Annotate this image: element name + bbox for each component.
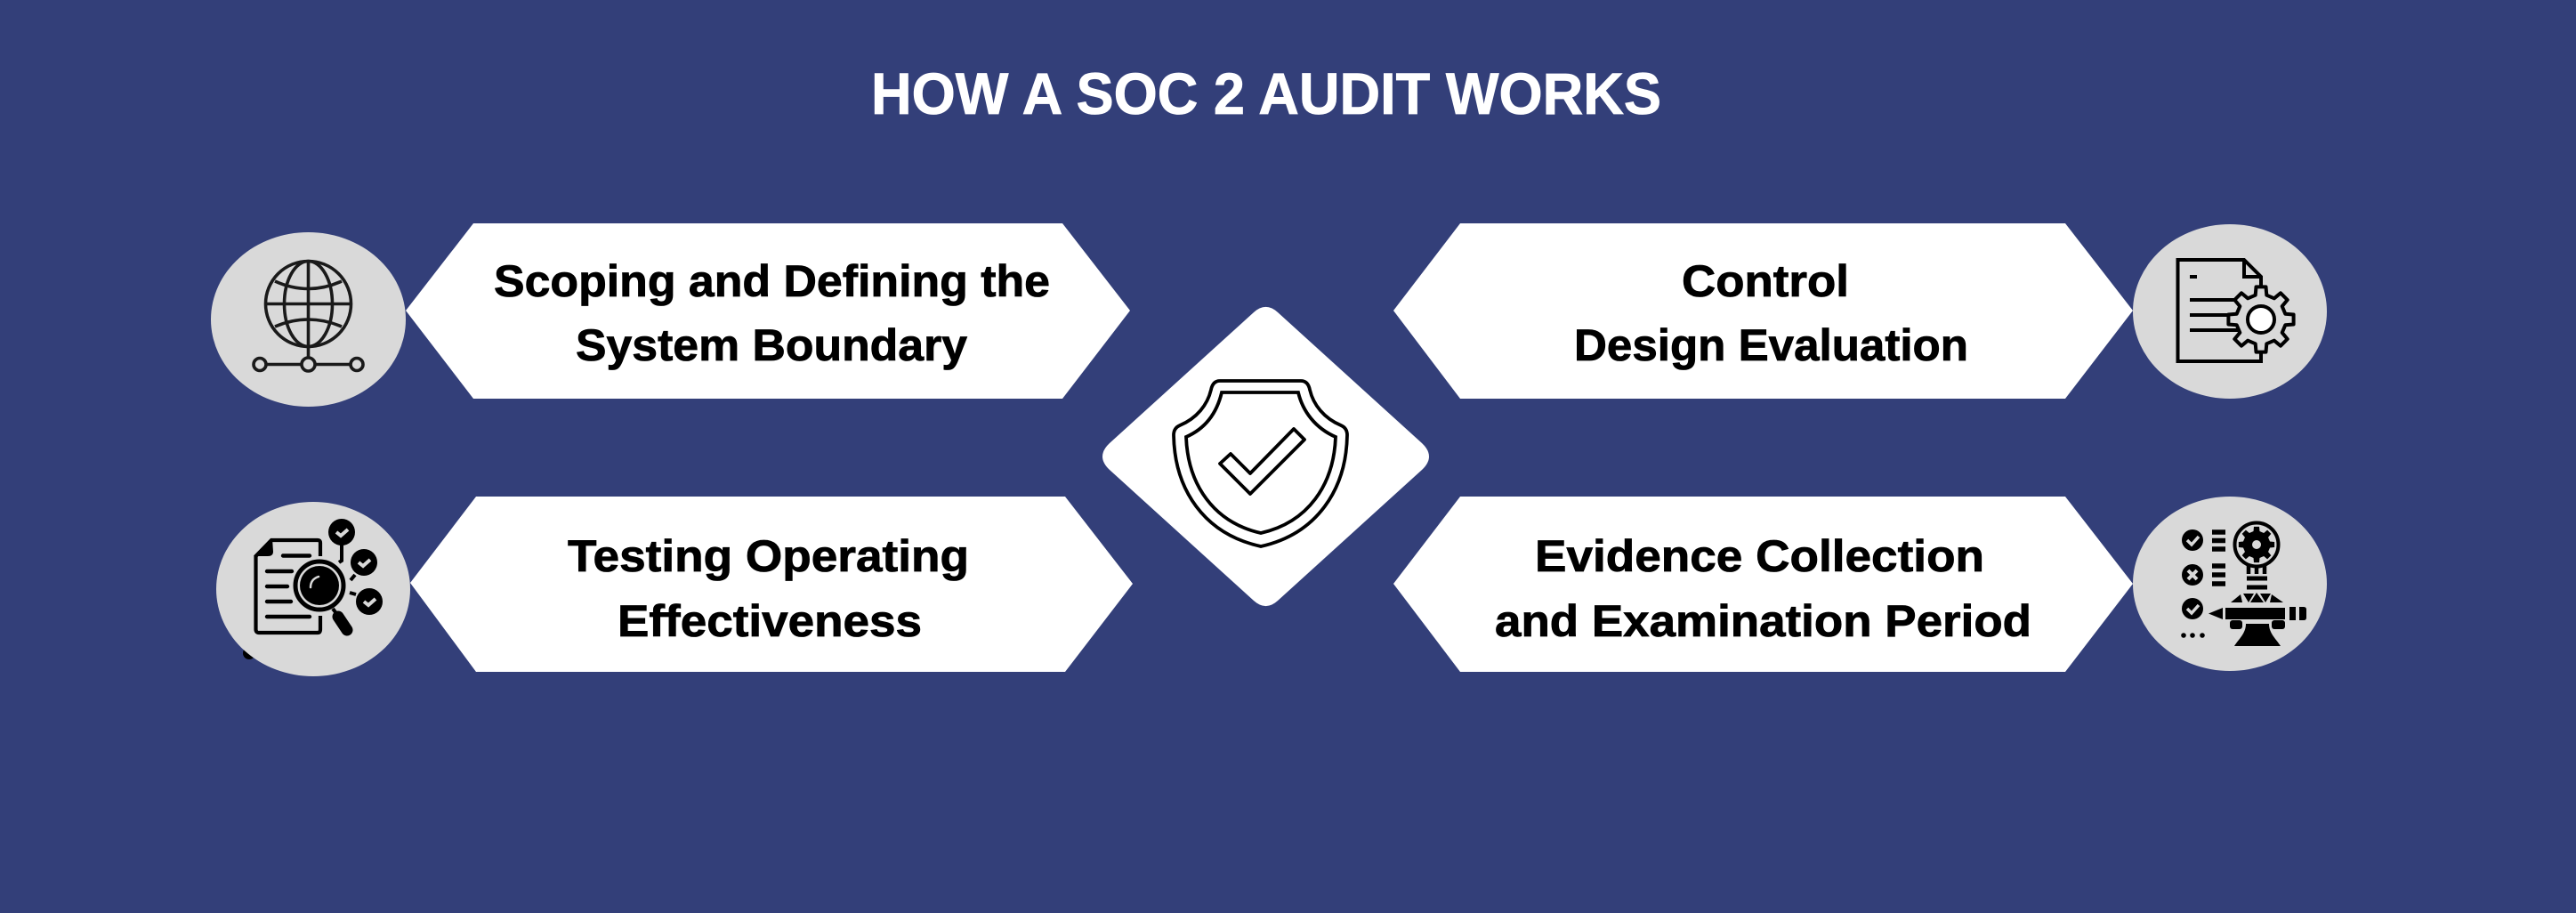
banner: evidence — [1393, 497, 2133, 672]
panel: scoping and defining the system boundary — [211, 223, 1130, 407]
text: evidence — [1495, 531, 2031, 646]
text: scoping — [494, 256, 1050, 370]
banner: control — [1393, 223, 2133, 399]
banner: scoping — [406, 223, 1130, 399]
text: scoping: System Boundary — [576, 320, 967, 370]
text: scoping: Scoping and Defining the — [494, 256, 1050, 306]
text: testing — [568, 531, 969, 646]
icon: document with magnifier and checks — [216, 502, 410, 676]
text: testing: Effectiveness — [618, 596, 922, 646]
text: control: Control — [1682, 256, 1849, 306]
icon: checklist and anvil — [2133, 497, 2327, 671]
icon: globe network — [211, 232, 406, 407]
text: control — [1574, 256, 1968, 370]
banner: testing — [410, 497, 1133, 672]
panel: control design evaluation — [1393, 223, 2327, 399]
text: control: Design Evaluation — [1574, 320, 1968, 370]
icon: shield with check mark — [1174, 381, 1347, 546]
text: evidence: and Examination Period — [1495, 596, 2031, 646]
text: evidence: Evidence Collection — [1535, 531, 1984, 581]
panel: evidence collection and examination period — [1393, 497, 2327, 672]
text: testing: Testing Operating — [568, 531, 969, 581]
title: HOW A SOC 2 AUDIT WORKS — [871, 61, 1661, 126]
centre badge: shield on diamond — [1102, 307, 1429, 606]
icon: document with gear — [2133, 224, 2327, 399]
diamond — [1102, 307, 1429, 606]
panel: testing operating effectiveness — [216, 497, 1133, 676]
